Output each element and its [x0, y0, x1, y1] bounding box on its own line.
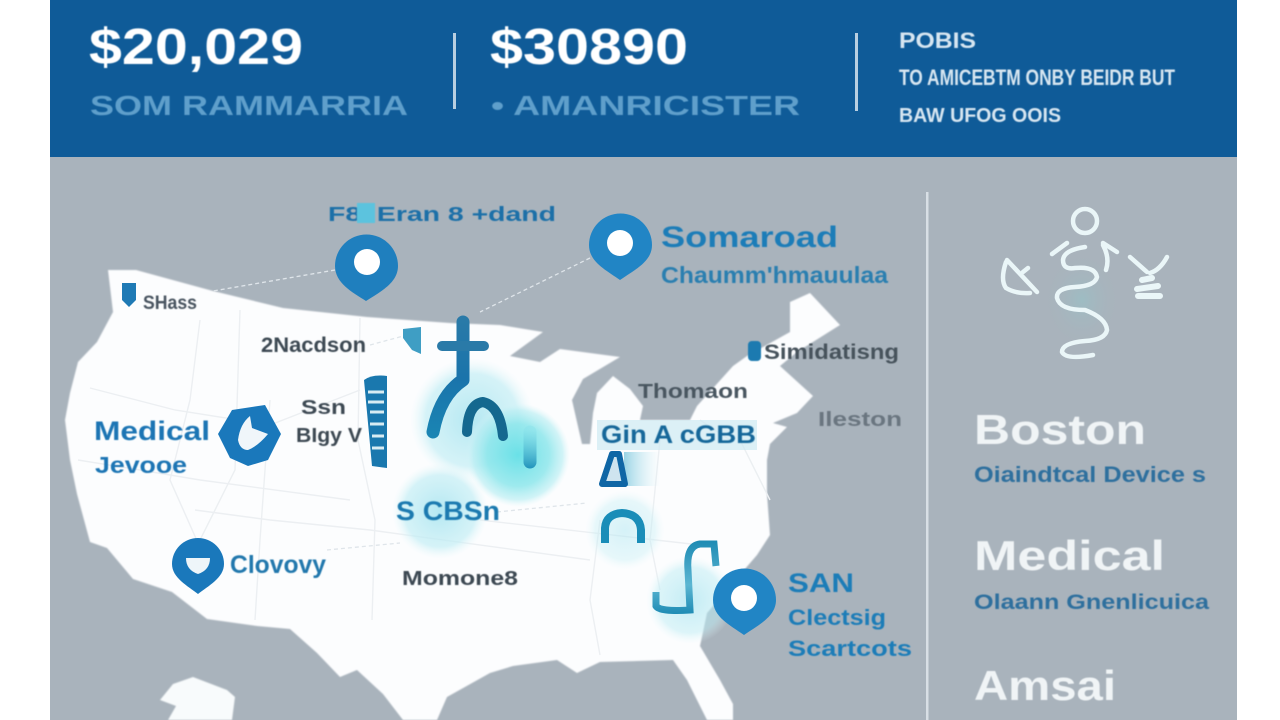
- map label: Thomaon: Thomaon: [638, 381, 748, 403]
- sidebar: Medical: Medical: [974, 532, 1165, 579]
- map label: S CBSn: S CBSn: [396, 496, 500, 526]
- icon: small marker north: [403, 327, 421, 354]
- map label: top: [328, 203, 556, 226]
- stat: second amount: $30890: [490, 18, 688, 75]
- text block: header notes: POBIS: [899, 28, 976, 53]
- map label: Medical Jevooe: Medical: [94, 416, 210, 446]
- map label: top: F8I Eran 8 +dand: [328, 204, 556, 226]
- map label: Clovovy: Clovovy: [230, 551, 326, 579]
- map label: Medical Jevooe: [94, 416, 210, 478]
- sidebar: Amsai: Amsai: [974, 662, 1116, 709]
- map label: San Eigy: BIgy V: [296, 425, 363, 447]
- text block: header notes: TO AMICEBTM ONBY BEIDR BUT: [899, 65, 1175, 90]
- icon: eastern device two: [605, 513, 641, 543]
- sidebar: Boston: Boston: [974, 406, 1146, 453]
- map label: Somaroad: Chaumm'hmauulaa: [661, 262, 888, 288]
- map label: San Clectig: [788, 568, 912, 661]
- map label: Momone: Momone8: [402, 568, 518, 590]
- sidebar: Medical: [974, 532, 1209, 614]
- map label: San Clectig: Clectsig: [788, 605, 886, 630]
- map label: San Eigy: [296, 397, 363, 447]
- pin: north: [335, 234, 398, 301]
- pin: southeast: [713, 569, 776, 635]
- icon: left column device: [364, 376, 387, 468]
- icon: caduceus figure: [1003, 209, 1167, 357]
- panel: map background: [50, 157, 1237, 720]
- icon: eastern device one: [602, 452, 660, 486]
- map label: Shas: SHass: [143, 293, 197, 314]
- map label: Simiaigsng: Simidatisng: [764, 341, 899, 364]
- icon: southeast device: [656, 544, 716, 610]
- map label: Zacdson: 2Nacdson: [261, 334, 366, 357]
- map: Alaska fragment: [160, 677, 235, 720]
- map label: San Eigy: Ssn: [301, 397, 346, 419]
- map label: Gin Acore: Gin A cGBB: [601, 421, 756, 449]
- text block: header notes: [899, 28, 1175, 127]
- stat: first amount: $20,029: [89, 18, 303, 75]
- pin: north east: [589, 214, 652, 280]
- map label: San Clectig: SAN: [788, 568, 854, 598]
- glow: behind caduceus: [1042, 250, 1122, 350]
- text block: header notes: BAW UFOG OOIS: [899, 105, 1061, 127]
- map label: Medical Jevooe: Jevooe: [95, 452, 187, 478]
- icon: central medical device: [433, 322, 530, 462]
- connector lines: [213, 258, 590, 550]
- sidebar: Boston: [974, 406, 1206, 487]
- map label: San Clectig: Scartcots: [788, 636, 912, 661]
- map label: Somaroad: Somaroad: [661, 221, 838, 254]
- map: United States: [65, 270, 840, 720]
- glow: central hotspots: [392, 358, 734, 644]
- map label: Somaroad: [661, 221, 888, 288]
- stat: second caption: • AMANRICISTER: [491, 90, 800, 121]
- panel: pale band behind eastern label: [597, 420, 757, 450]
- panel: header stats band: [50, 0, 1237, 157]
- sidebar: Medical: Olaann Gnenlicuica: [974, 591, 1209, 614]
- icon: northwest marker: [122, 283, 136, 307]
- map label: Ileston: Ileston: [818, 409, 902, 431]
- pin: medical west: [218, 405, 281, 466]
- sidebar: Boston: Oiaindtcal Device s: [974, 462, 1206, 487]
- stat: first caption: SOM RAMMARRIA: [90, 90, 408, 121]
- pin: southwest: [172, 538, 224, 594]
